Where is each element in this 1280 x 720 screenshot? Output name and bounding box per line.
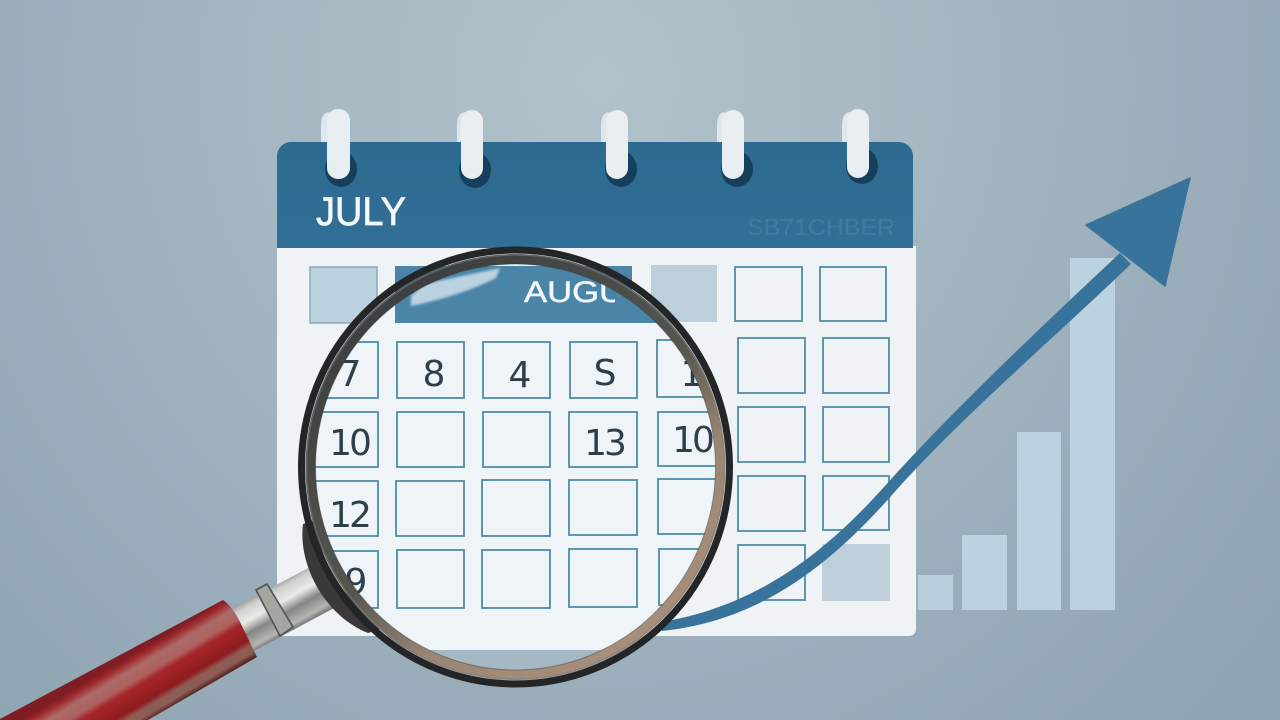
date numbers: 7 (339, 354, 361, 395)
date numbers: 12 (329, 495, 369, 536)
date numbers: 1 (681, 354, 703, 395)
growth arrow (662, 178, 1190, 631)
lens glare (411, 268, 500, 306)
arrow head (1086, 178, 1190, 286)
month label: July: JULY (316, 190, 406, 234)
date numbers: 4 (509, 355, 531, 396)
calendar page (277, 246, 916, 636)
shaded cell (822, 544, 890, 601)
binding rings (321, 109, 878, 188)
calendar (277, 109, 916, 636)
date numbers: S (594, 353, 616, 394)
month label: August: AUGU (524, 276, 624, 309)
calendar cells, top row (310, 265, 886, 323)
date numbers: 10 (672, 420, 713, 461)
date numbers: 10 (329, 423, 370, 464)
month band in lens (395, 266, 665, 323)
date numbers: 13 (584, 423, 625, 464)
date numbers: 9 (345, 562, 367, 603)
arrow shaft (662, 253, 1131, 631)
date numbers: 8 (423, 354, 445, 395)
faded month label: September: SB71CHBER (747, 214, 895, 240)
lens glass (430, 650, 600, 670)
collar (302, 520, 384, 633)
bar chart (918, 258, 1115, 610)
ferrule (225, 566, 334, 653)
calendar header (277, 142, 913, 248)
date numbers (329, 353, 713, 603)
handle (0, 600, 257, 720)
knurled ring (256, 584, 293, 636)
calendar cells, right columns (738, 338, 889, 600)
lens contents (316, 266, 716, 670)
lens ring (302, 250, 730, 684)
magnifying glass (0, 250, 730, 720)
date cells (309, 340, 720, 608)
